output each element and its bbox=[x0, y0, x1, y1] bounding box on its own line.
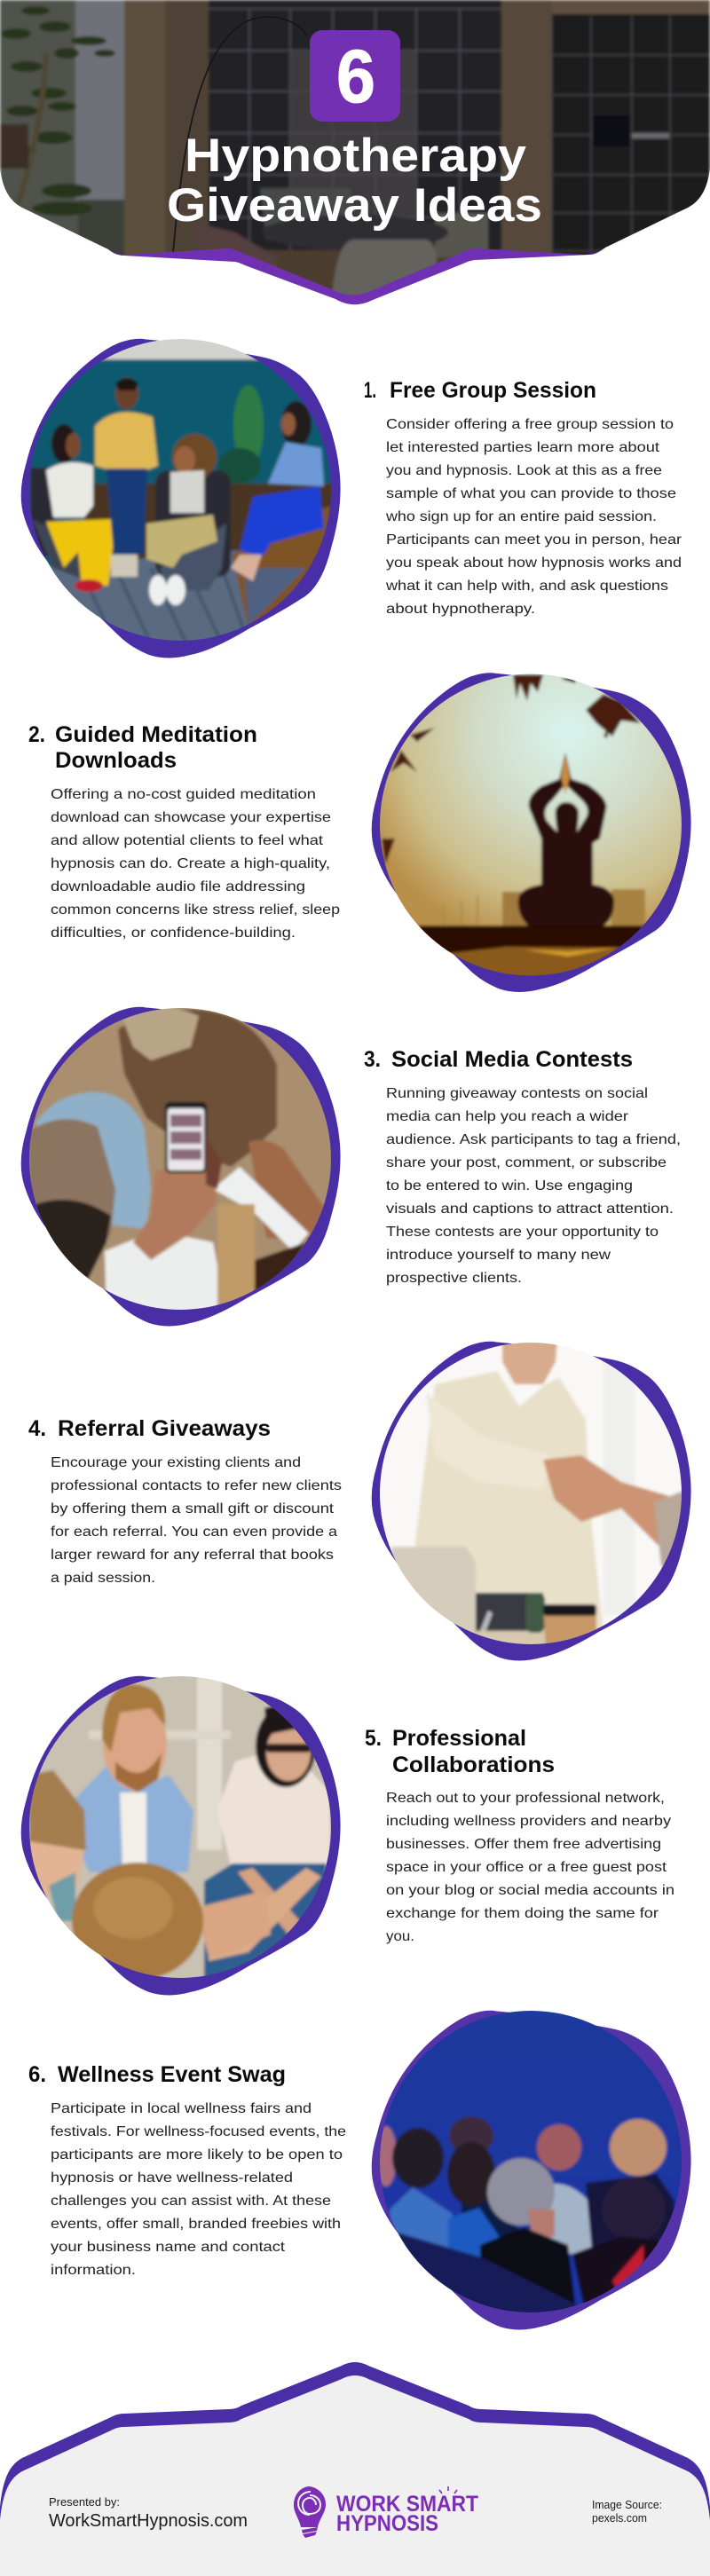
photo: group joining hands bbox=[21, 1673, 341, 1995]
image source: pexels.com bbox=[592, 2512, 647, 2525]
body text: by offering them a small gift or discount bbox=[51, 1501, 335, 1516]
body text: These contests are your opportunity to bbox=[386, 1225, 659, 1240]
body text: you and hypnosis. Look at this as a free bbox=[386, 463, 662, 478]
body text: exchange for them doing the same for bbox=[386, 1906, 659, 1921]
body text: difficulties, or confidence-building. bbox=[51, 926, 296, 941]
body text: Participate in local wellness fairs and bbox=[51, 2101, 312, 2116]
body text: larger reward for any referral that books bbox=[51, 1548, 334, 1563]
photo: handshake bbox=[372, 1340, 691, 1661]
presented by bbox=[49, 2496, 248, 2531]
footer grey panel bbox=[0, 2375, 710, 2576]
body text: Reach out to your professional network, bbox=[386, 1791, 665, 1806]
heading: Free Group Session bbox=[390, 378, 596, 403]
hands bbox=[195, 1890, 271, 1957]
phone and hands bbox=[133, 1167, 217, 1260]
logo rays bbox=[439, 2486, 457, 2493]
heading: Referral Giveaways bbox=[58, 1416, 271, 1441]
header bbox=[0, 0, 710, 307]
body text: media can help you reach a wider bbox=[386, 1109, 629, 1124]
body text bbox=[51, 1455, 342, 1586]
heading: 5. bbox=[365, 1726, 382, 1751]
right dark head bbox=[602, 2178, 666, 2241]
man bbox=[64, 1766, 193, 1872]
foreground seat bbox=[397, 2231, 579, 2312]
body text: what it can help with, and ask questions bbox=[385, 579, 668, 594]
title: Hypnotherapy bbox=[185, 130, 527, 182]
lamp arc bbox=[173, 17, 306, 253]
body text: hypnosis can do. Create a high-quality, bbox=[51, 856, 330, 871]
body text: Consider offering a free group session to bbox=[386, 417, 674, 432]
body text bbox=[51, 2101, 346, 2278]
icon: spiral light bulb bbox=[294, 2486, 326, 2538]
photo: group sitting against teal wall bbox=[21, 337, 341, 658]
footer purple band bbox=[0, 2362, 710, 2576]
body text: share your post, comment, or subscribe bbox=[386, 1155, 667, 1170]
body text: your business name and contact bbox=[51, 2240, 286, 2255]
heading: Guided Meditation bbox=[55, 722, 257, 747]
heading: 3. bbox=[364, 1047, 381, 1072]
header purple ribbon bbox=[108, 240, 605, 304]
heading bbox=[28, 722, 257, 773]
body text: you speak about how hypnosis works and bbox=[386, 555, 682, 571]
body text bbox=[386, 1086, 681, 1286]
body text: professional contacts to refer new clients bbox=[51, 1478, 342, 1493]
heading: Wellness Event Swag bbox=[58, 2062, 286, 2087]
body text: who sign up for an entire paid session. bbox=[385, 509, 657, 524]
man with plaid shirt bbox=[392, 2128, 444, 2188]
plant bbox=[233, 385, 264, 467]
presented by: Presented by: bbox=[49, 2496, 120, 2509]
body text: you. bbox=[386, 1929, 414, 1944]
body text: download can showcase your expertise bbox=[51, 810, 331, 825]
body text bbox=[385, 417, 682, 617]
heading: 4. bbox=[28, 1416, 46, 1441]
photo: hands holding phone bbox=[21, 1003, 341, 1326]
body text: sample of what you can provide to those bbox=[386, 486, 676, 501]
body text bbox=[386, 1791, 674, 1944]
body text: a paid session. bbox=[51, 1571, 155, 1586]
body text: audience. Ask participants to tag a friend, bbox=[386, 1132, 681, 1147]
heading bbox=[365, 1726, 555, 1777]
hair bbox=[29, 1117, 117, 1237]
hands and arm bbox=[541, 1453, 670, 1546]
body text: Participants can meet you in person, hear bbox=[386, 532, 682, 547]
body text: common concerns like stress relief, sleep bbox=[51, 902, 340, 918]
center dark head bbox=[447, 2142, 495, 2206]
presented by: WorkSmartHypnosis.com bbox=[49, 2511, 248, 2531]
number badge: 6 bbox=[336, 35, 375, 118]
body text: challenges you can assist with. At these bbox=[51, 2194, 331, 2209]
heading: Professional bbox=[392, 1726, 526, 1751]
body text: hypnosis or have wellness-related bbox=[51, 2170, 293, 2186]
panel: idea 2 bbox=[28, 670, 691, 992]
panel: idea 3 bbox=[21, 1003, 681, 1326]
body text: businesses. Offer them free advertising bbox=[386, 1837, 661, 1852]
heading: 2. bbox=[28, 722, 45, 747]
logo wordmark: WORK SMART bbox=[336, 2492, 478, 2517]
body text: about hypnotherapy. bbox=[386, 602, 535, 617]
heading: Social Media Contests bbox=[391, 1047, 633, 1072]
body text: Running giveaway contests on social bbox=[386, 1086, 648, 1101]
logo: Work Smart Hypnosis bbox=[294, 2486, 478, 2538]
body text: on your blog or social media accounts in bbox=[386, 1883, 674, 1898]
body text bbox=[51, 787, 340, 941]
body text: Encourage your existing clients and bbox=[51, 1455, 301, 1470]
header photo: office interior bbox=[0, 0, 710, 307]
body text: and allow potential clients to feel what bbox=[51, 833, 324, 848]
panel: idea 4 bbox=[28, 1340, 691, 1661]
body text: including wellness providers and nearby bbox=[386, 1814, 671, 1829]
panel: idea 6 bbox=[28, 2007, 691, 2330]
heading: 6. bbox=[28, 2062, 46, 2087]
logo wordmark bbox=[336, 2492, 478, 2536]
image source: Image Source: bbox=[592, 2499, 662, 2511]
chairs and table bbox=[193, 225, 277, 267]
body text: space in your office or a free guest post bbox=[386, 1860, 667, 1875]
woman bbox=[217, 1753, 330, 1877]
heading: Downloads bbox=[55, 748, 177, 773]
body text: visuals and captions to attract attention. bbox=[386, 1201, 674, 1217]
body text: introduce yourself to many new bbox=[386, 1248, 611, 1263]
sweater and sleeve bbox=[213, 1167, 309, 1251]
photo: event audience on blue bbox=[372, 2007, 691, 2330]
foreground curly head bbox=[72, 1863, 203, 1980]
body text: festivals. For wellness-focused events, the bbox=[51, 2124, 346, 2139]
number badge bbox=[310, 30, 400, 122]
body text: prospective clients. bbox=[386, 1271, 522, 1286]
panel: idea 5 bbox=[21, 1673, 674, 1995]
heading: 1. bbox=[364, 378, 376, 403]
title: Giveaway Ideas bbox=[167, 179, 542, 232]
gray head bbox=[487, 2158, 555, 2225]
body text: for each referral. You can even provide a bbox=[51, 1524, 337, 1540]
panel: idea 1 bbox=[21, 337, 682, 658]
silhouette bbox=[518, 752, 614, 926]
laptop bbox=[390, 1546, 477, 1631]
photo: meditation silhouette at sunset bbox=[372, 670, 691, 992]
body text: participants are more likely to be open to bbox=[51, 2147, 343, 2162]
title bbox=[167, 130, 542, 232]
heading: Collaborations bbox=[392, 1753, 555, 1777]
body text: to be entered to win. Use engaging bbox=[386, 1178, 633, 1193]
footer bbox=[0, 2362, 710, 2576]
left chair and person bbox=[30, 468, 55, 556]
left girl bbox=[29, 1770, 86, 1850]
standing person bbox=[115, 377, 138, 409]
body text: let interested parties learn more about bbox=[386, 440, 660, 455]
logo wordmark: HYPNOSIS bbox=[336, 2511, 438, 2536]
right person bbox=[281, 401, 312, 447]
body text: information. bbox=[51, 2263, 136, 2278]
body text: events, offer small, branded freebies with bbox=[51, 2217, 341, 2232]
body text: downloadable audio file addressing bbox=[51, 879, 305, 894]
leaves bbox=[382, 673, 641, 865]
plant bbox=[1, 6, 115, 216]
table and items bbox=[472, 1628, 548, 1644]
body text: Offering a no-cost guided meditation bbox=[51, 787, 316, 802]
center chair and person bbox=[155, 470, 231, 577]
image source bbox=[592, 2499, 662, 2525]
